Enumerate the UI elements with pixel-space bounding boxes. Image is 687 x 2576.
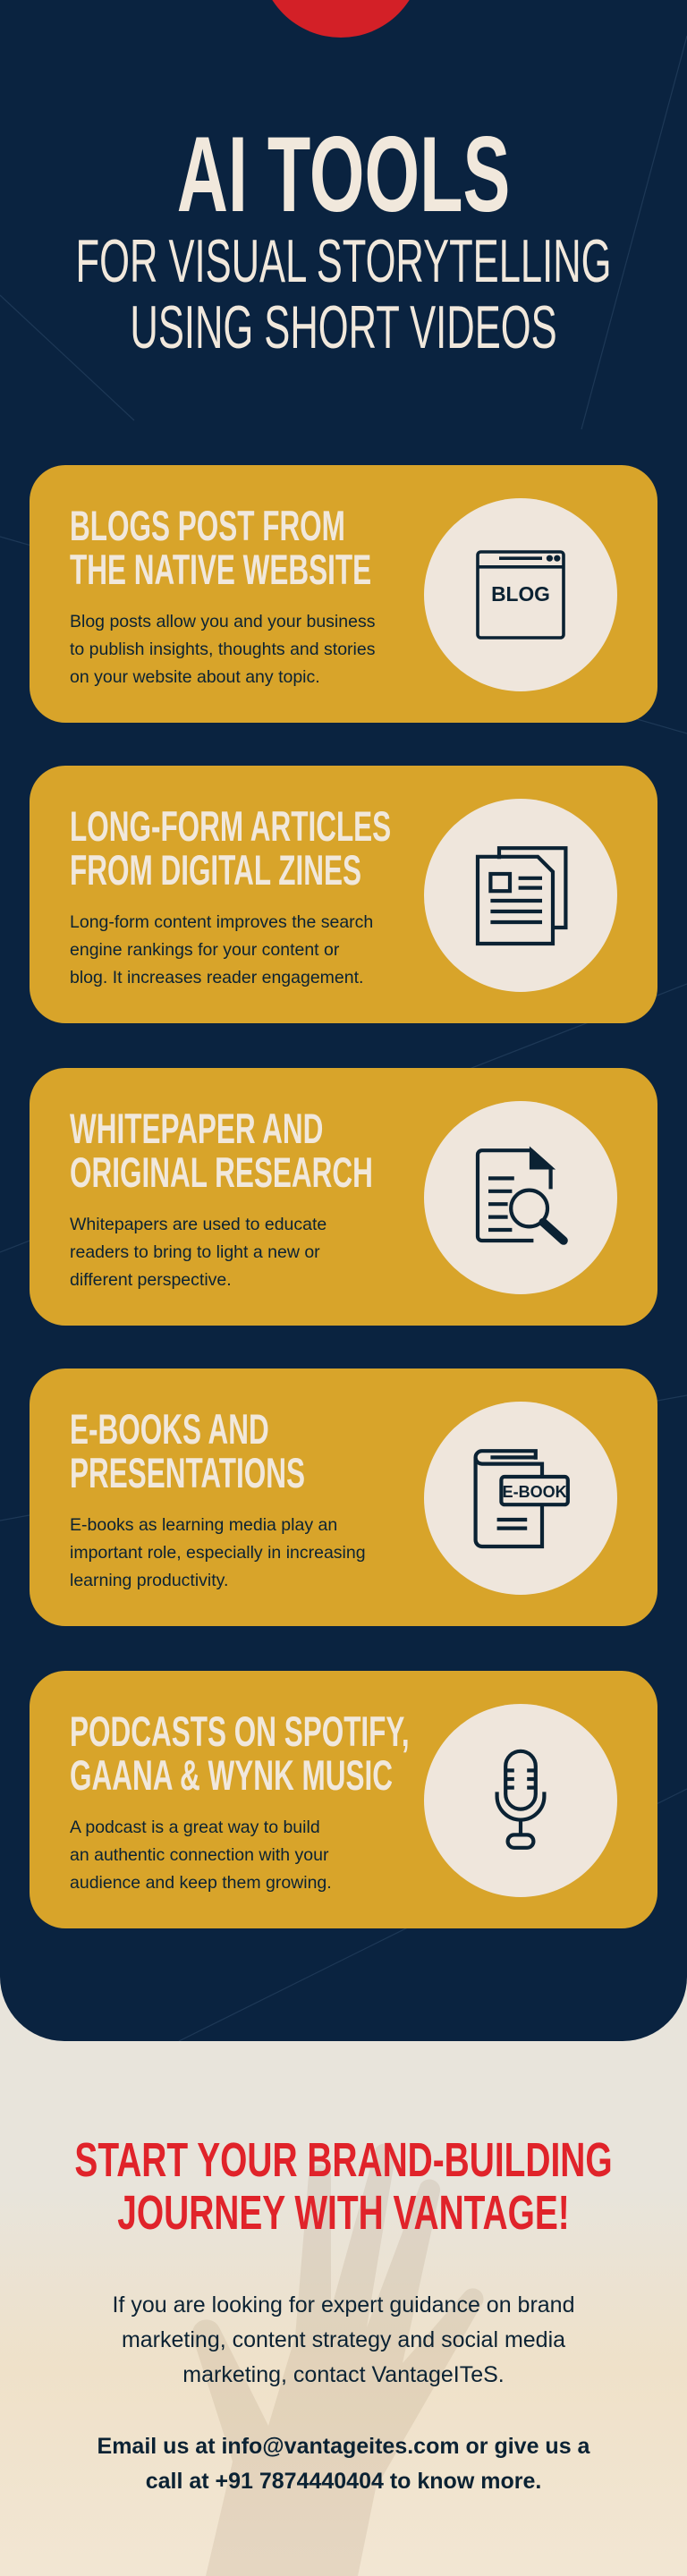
icon: blog: BLOG (491, 582, 550, 606)
card: long-form: FROM DIGITAL ZINES (70, 846, 361, 894)
subtitle (76, 227, 611, 361)
icon: microphone (424, 1704, 617, 1897)
contact text: Email us at info@vantageites.com or give us a (98, 2434, 589, 2459)
card: long-form (30, 766, 657, 1023)
card: long-form: blog. It increases reader engagement. (70, 968, 363, 987)
logo (259, 0, 422, 38)
card: podcasts: PODCASTS ON SPOTIFY, (70, 1707, 410, 1755)
CTA heading: JOURNEY WITH VANTAGE! (117, 2186, 570, 2240)
card: whitepaper: ORIGINAL RESEARCH (70, 1148, 373, 1196)
card: blogs (30, 465, 657, 723)
card: ebooks: E-books as learning media play an (70, 1515, 337, 1535)
card: long-form: Long-form content improves the search (70, 912, 373, 932)
icon: e-book: E-BOOK (503, 1483, 567, 1501)
card: podcasts: audience and keep them growing. (70, 1873, 332, 1893)
card: whitepaper: Whitepapers are used to educate (70, 1215, 327, 1234)
card: blogs: BLOGS POST FROM (70, 502, 345, 549)
CTA body: marketing, content strategy and social media (122, 2327, 565, 2352)
CTA heading (74, 2133, 613, 2240)
card: podcasts: GAANA & WYNK MUSIC (70, 1751, 393, 1799)
contact text (98, 2434, 590, 2494)
card: long-form: engine rankings for your content or (70, 940, 339, 960)
card: ebooks: learning productivity. (70, 1571, 228, 1590)
card: blogs: Blog posts allow you and your business (70, 612, 375, 631)
card: whitepaper: different perspective. (70, 1270, 232, 1290)
card: ebooks: PRESENTATIONS (70, 1449, 305, 1496)
icon: research (424, 1101, 617, 1294)
card: whitepaper: readers to bring to light a new or (70, 1242, 320, 1262)
icon: e-book (424, 1402, 617, 1595)
card: ebooks: important role, especially in increasing (70, 1543, 366, 1563)
card: ebooks: E-BOOKS AND (70, 1405, 269, 1453)
CTA body (112, 2292, 574, 2387)
icon: blog (424, 498, 617, 691)
card: blogs: to publish insights, thoughts and stories (70, 640, 375, 659)
subtitle: FOR VISUAL STORYTELLING (76, 227, 611, 295)
icon: documents (424, 799, 617, 992)
card: podcasts (30, 1671, 657, 1928)
dark panel (0, 0, 687, 2041)
CTA body: If you are looking for expert guidance on brand (112, 2292, 574, 2318)
card: long-form: LONG-FORM ARTICLES (70, 802, 391, 850)
card: podcasts: an authentic connection with your (70, 1845, 328, 1865)
title: AI TOOLS (177, 114, 510, 234)
card: blogs: on your website about any topic. (70, 667, 320, 687)
card: whitepaper: WHITEPAPER AND (70, 1105, 323, 1152)
subtitle: USING SHORT VIDEOS (130, 293, 557, 361)
contact text: call at +91 7874440404 to know more. (146, 2469, 541, 2494)
card: blogs: THE NATIVE WEBSITE (70, 546, 371, 593)
card: whitepaper (30, 1068, 657, 1326)
hand silhouette decoration (192, 2143, 483, 2576)
CTA body: marketing, contact VantageITeS. (182, 2362, 505, 2387)
card: podcasts: A podcast is a great way to build (70, 1818, 320, 1837)
CTA heading: START YOUR BRAND-BUILDING (74, 2133, 613, 2187)
card: ebooks (30, 1368, 657, 1626)
